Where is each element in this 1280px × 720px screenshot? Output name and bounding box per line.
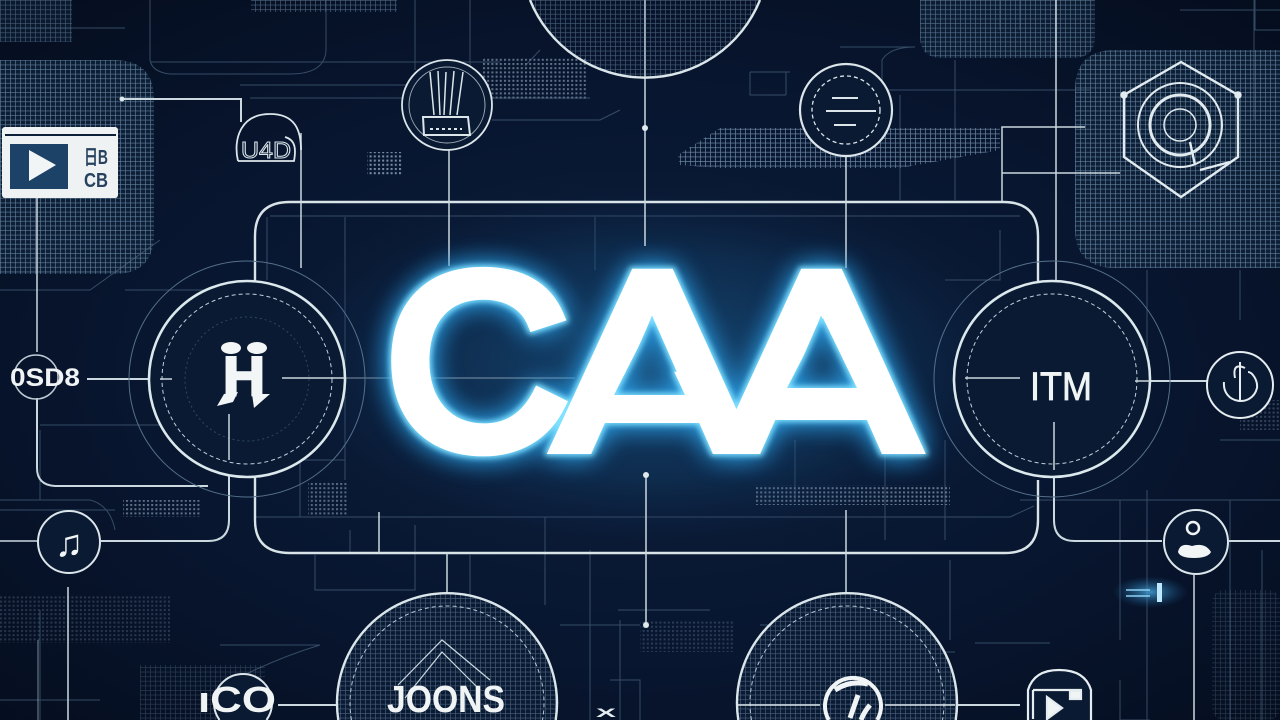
label: 0SD8 circle: 0SD8 bbox=[10, 364, 80, 392]
icon: gauge circle bbox=[800, 64, 892, 156]
left hub circle bbox=[129, 261, 365, 497]
bottom right circle bbox=[737, 593, 957, 720]
label: ICO circle: ıCO bbox=[198, 679, 276, 720]
card label: 日B bbox=[84, 147, 108, 169]
title: CAA bbox=[386, 222, 916, 500]
arch label: U4D bbox=[241, 137, 291, 163]
bottom left circle bbox=[337, 593, 557, 720]
connector nodes bbox=[120, 96, 1060, 628]
icon: arch with C4D bbox=[237, 114, 301, 163]
main rounded frame bbox=[255, 202, 1038, 553]
icon: music note circle: ♫ bbox=[55, 523, 83, 565]
card label lower: CB bbox=[84, 170, 108, 192]
icon: globe swirl bbox=[825, 678, 881, 720]
central glow halo bbox=[265, 175, 1045, 555]
title: CAA: C bbox=[386, 223, 568, 500]
icon: hub glyph: H bbox=[223, 345, 265, 407]
icon: person circle bbox=[1164, 510, 1228, 574]
icon: circle with comb device bbox=[402, 60, 492, 150]
title: CAA: A bbox=[727, 222, 916, 500]
label: 0SD8 circle bbox=[10, 355, 80, 399]
label: ITM: ITM bbox=[1030, 365, 1092, 409]
top circle bbox=[530, 0, 760, 78]
right hub circle bbox=[934, 261, 1170, 497]
icon: knot circle bbox=[1207, 352, 1273, 418]
icon: bottom video frame bbox=[1028, 670, 1091, 720]
icon: hexagon target bbox=[1122, 62, 1240, 197]
label: bottom edge glyph: X bbox=[596, 706, 616, 720]
icon: video card bbox=[2, 127, 118, 198]
blue light accent bbox=[1112, 576, 1188, 608]
label: JOONS: JOONS bbox=[387, 679, 505, 720]
title: CAA: A bbox=[558, 222, 747, 500]
icon: music note circle bbox=[38, 511, 100, 573]
